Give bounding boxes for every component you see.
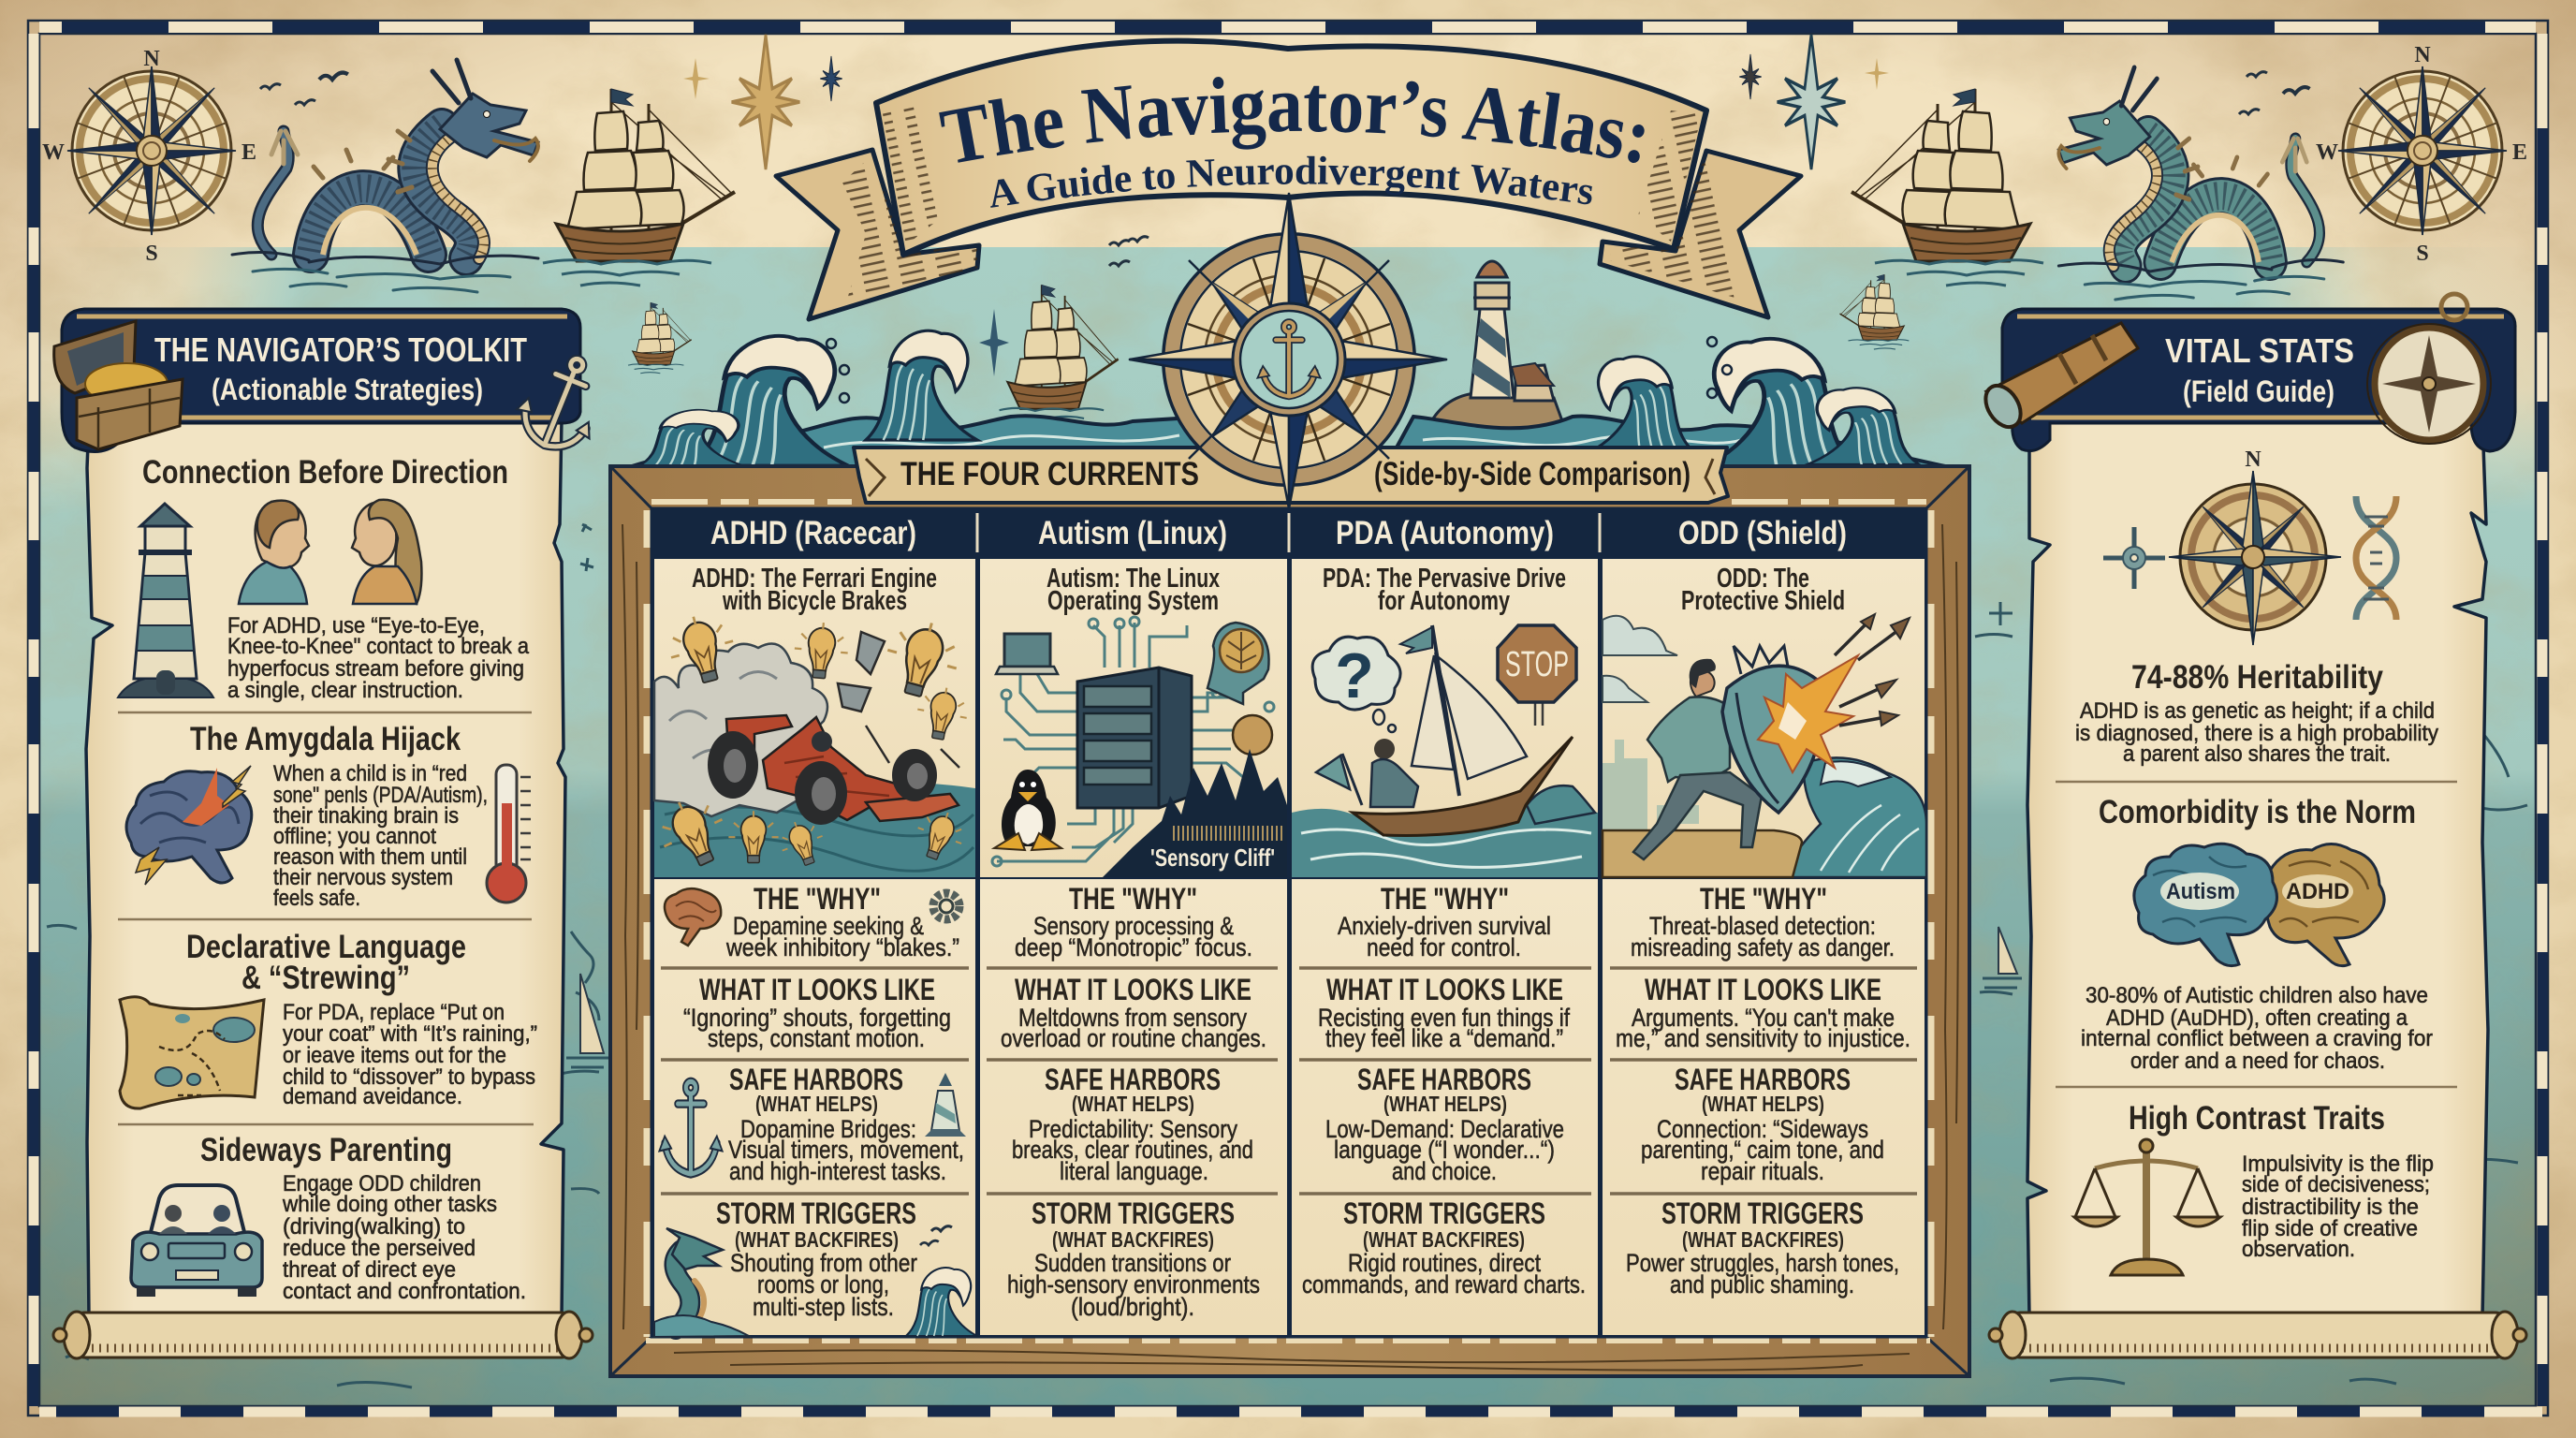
column ODD: (WHAT BACKFIRES) xyxy=(1682,1227,1844,1252)
column PDA: SAFE HARBORS xyxy=(1357,1063,1531,1096)
column ADHD: rooms or long, xyxy=(757,1270,889,1299)
panel: vital stats: 74-88% Heritability xyxy=(2131,659,2383,696)
comparison table xyxy=(650,508,1926,1337)
sailboat illustration: STOP xyxy=(1505,645,1569,684)
column ODD xyxy=(1603,515,1926,1299)
icon: dragon xyxy=(654,1228,749,1337)
column ODD: Power struggles, harsh tones, xyxy=(1626,1249,1899,1277)
icon: treasure map xyxy=(120,997,264,1108)
column PDA: (WHAT BACKFIRES) xyxy=(1363,1227,1525,1252)
compass rose top left: E xyxy=(242,140,256,165)
icon: lighthouse xyxy=(925,1073,966,1137)
sailboat illustration: ? xyxy=(1335,640,1374,712)
banner: VITAL STATS xyxy=(2165,331,2354,370)
heritability illustration: N xyxy=(2245,448,2261,472)
panel: navigator's toolkit: For PDA, replace “Put on xyxy=(283,1000,505,1025)
birds near compass xyxy=(1109,237,1149,266)
panel: vital stats: Comorbidity is the Norm xyxy=(2099,794,2416,830)
column ODD: repair rituals. xyxy=(1701,1157,1824,1185)
panel: vital stats: flip side of creative xyxy=(2242,1216,2418,1241)
small sailboat left margin xyxy=(566,974,608,1067)
column PDA: THE "WHY" xyxy=(1381,882,1509,916)
column PDA: need for control. xyxy=(1367,933,1521,961)
icon: overlapping brains: ADHD xyxy=(2286,879,2349,904)
panel: navigator's toolkit: Connection Before Direction xyxy=(142,454,508,491)
panel: navigator's toolkit: demand aveidance. xyxy=(283,1084,462,1109)
panel: navigator's toolkit: while doing other tasks xyxy=(282,1192,497,1217)
column ODD: and public shaming. xyxy=(1670,1270,1854,1299)
panel: navigator's toolkit: their nervous system xyxy=(273,865,453,890)
title text xyxy=(939,77,1645,208)
column PDA: and choice. xyxy=(1392,1157,1497,1185)
small boat left of compass xyxy=(628,302,692,374)
column Autism: Sensory processing & xyxy=(1033,912,1234,940)
icon: brain with lightning xyxy=(126,766,252,885)
central compass wheel xyxy=(1130,194,1446,508)
icon: spyglass xyxy=(1979,323,2138,433)
column ODD: THE "WHY" xyxy=(1700,882,1827,916)
icon: gear xyxy=(933,893,959,919)
column Autism: STORM TRIGGERS xyxy=(1032,1196,1235,1230)
ocean waves left xyxy=(632,330,1236,468)
panel: navigator's toolkit: your coat” with “It’s raining,” xyxy=(283,1021,537,1047)
column PDA: WHAT IT LOOKS LIKE xyxy=(1326,973,1563,1006)
icon: thermometer xyxy=(487,765,531,902)
column PDA: PDA (Autonomy) xyxy=(1336,515,1554,551)
compass rose top left: S xyxy=(145,242,158,266)
column PDA: language (“I wonder...“) xyxy=(1334,1136,1555,1164)
server and circuits illustration: 'Sensory Cliff' xyxy=(1150,844,1275,872)
compass rose top right: W xyxy=(2316,140,2338,165)
panel: navigator's toolkit: Knee-to-Knee" contact to break a xyxy=(227,634,529,659)
panel: navigator's toolkit: Declarative Language xyxy=(186,929,466,965)
dividers between rows xyxy=(661,968,1917,1194)
panel: navigator's toolkit: their tinaking brain is xyxy=(273,803,459,829)
banner xyxy=(2002,309,2515,451)
title text: A Guide to Neurodivergent Waters xyxy=(990,155,1592,208)
panel: navigator's toolkit: & “Strewing” xyxy=(242,960,410,996)
icon: birds xyxy=(920,1226,952,1245)
column ODD: Threat-blased detection: xyxy=(1649,912,1876,940)
column PDA: they feel like a “demand.” xyxy=(1325,1024,1563,1052)
shield warrior illustration xyxy=(1603,614,1926,877)
column ODD: WHAT IT LOOKS LIKE xyxy=(1645,973,1881,1006)
panel: navigator's toolkit xyxy=(53,309,615,1358)
column PDA: (WHAT HELPS) xyxy=(1383,1092,1507,1116)
column ADHD: (WHAT HELPS) xyxy=(755,1092,878,1116)
column ODD: misreading safety as danger. xyxy=(1631,933,1895,961)
panel: vital stats: observation. xyxy=(2242,1237,2355,1262)
wooden frame xyxy=(610,466,1969,1376)
column ODD: parenting,“ caim tone, and xyxy=(1641,1136,1884,1164)
birds left xyxy=(260,73,348,105)
column ADHD: THE "WHY" xyxy=(754,882,881,916)
small sailboat right margin xyxy=(1983,927,2022,988)
panel: navigator's toolkit: threat of direct eye xyxy=(283,1257,456,1283)
compass rose top right: E xyxy=(2512,140,2527,165)
column Autism: breaks, clear routines, and xyxy=(1012,1136,1253,1164)
column PDA: Low-Demand: Declarative xyxy=(1325,1115,1564,1143)
column Autism: (WHAT HELPS) xyxy=(1072,1092,1194,1116)
small boat right of compass xyxy=(1840,274,1909,349)
panel: vital stats: internal conflict between a craving for xyxy=(2081,1026,2433,1051)
navy star near ship xyxy=(979,309,1009,376)
column Autism: Autism (Linux) xyxy=(1038,515,1227,551)
column ADHD: WHAT IT LOOKS LIKE xyxy=(699,973,935,1006)
compass rose top right xyxy=(2316,43,2527,266)
icon: lighthouse xyxy=(118,504,213,697)
four currents signboard xyxy=(854,448,1728,503)
panel: navigator's toolkit: The Amygdala Hijack xyxy=(190,721,461,757)
column ODD: Protective Shield xyxy=(1681,586,1845,616)
column PDA: Anxiely-driven survival xyxy=(1338,912,1551,940)
panel: vital stats: Impulsivity is the flip xyxy=(2242,1152,2434,1177)
column Autism: SAFE HARBORS xyxy=(1045,1063,1221,1096)
panel: navigator's toolkit: For ADHD, use “Eye-to-Eye, xyxy=(227,613,485,638)
stars left xyxy=(683,35,842,169)
compass rose top right: N xyxy=(2414,43,2431,67)
panel: navigator's toolkit: feels safe. xyxy=(273,886,360,911)
panel: navigator's toolkit: Sideways Parenting xyxy=(200,1132,452,1168)
icon: balance scale xyxy=(2074,1139,2220,1275)
gallery ship centre xyxy=(1000,285,1119,427)
column ADHD xyxy=(650,515,977,1337)
birds right xyxy=(2239,72,2310,114)
column Autism: overload or routine changes. xyxy=(1001,1024,1266,1052)
column ODD: ODD: The xyxy=(1717,564,1809,594)
icon: anchor xyxy=(508,345,615,460)
column ODD: SAFE HARBORS xyxy=(1675,1063,1851,1096)
panel: navigator's toolkit: contact and confrontation. xyxy=(283,1279,526,1304)
racecar illustration xyxy=(650,609,975,877)
bottom scroll roll xyxy=(53,1312,593,1358)
ocean waves right xyxy=(1385,337,1945,468)
panel: vital stats: order and a need for chaos. xyxy=(2130,1049,2385,1074)
column PDA xyxy=(1292,515,1598,1299)
heritability illustration xyxy=(2103,448,2396,645)
column Autism: deep “Monotropic” focus. xyxy=(1015,933,1252,961)
column ADHD: ADHD (Racecar) xyxy=(710,515,916,551)
four currents signboard: THE FOUR CURRENTS xyxy=(900,456,1199,492)
panel: vital stats: is diagnosed, there is a high probability xyxy=(2075,721,2439,746)
sea serpent left xyxy=(232,60,538,292)
column PDA: for Autonomy xyxy=(1378,586,1510,616)
compass rose top left: N xyxy=(143,47,160,71)
title text: The Navigator’s Atlas: xyxy=(939,77,1645,163)
column ADHD: SAFE HARBORS xyxy=(729,1063,903,1096)
panel: navigator's toolkit: reduce the perseived xyxy=(283,1236,476,1261)
banner: THE NAVIGATOR’S TOOLKIT xyxy=(154,330,527,369)
panel: vital stats: 30-80% of Autistic children also have xyxy=(2086,983,2428,1008)
column PDA: Recisting even fun things if xyxy=(1318,1004,1570,1032)
panel: navigator's toolkit: reason with them until xyxy=(273,844,467,870)
column ADHD: Dopamine Bridges: xyxy=(740,1115,916,1143)
server and circuits illustration xyxy=(992,617,1287,877)
panel: vital stats: High Contrast Traits xyxy=(2129,1100,2385,1137)
column PDA: PDA: The Pervasive Drive xyxy=(1323,564,1566,594)
panel: vital stats: ADHD (AuDHD), often creating a xyxy=(2106,1005,2408,1031)
column ADHD: (WHAT BACKFIRES) xyxy=(735,1227,899,1252)
icon: overlapping brains: Autism xyxy=(2166,879,2235,904)
ribbon main band xyxy=(876,41,1706,255)
column Autism: Predictability: Sensory xyxy=(1029,1115,1237,1143)
panel: vital stats: ADHD is as genetic as height; if a child xyxy=(2080,698,2435,724)
column ODD: Connection: “Sideways xyxy=(1657,1115,1868,1143)
column Autism: (WHAT BACKFIRES) xyxy=(1052,1227,1214,1252)
sailboat illustration xyxy=(1292,625,1598,877)
column Autism: (loud/bright). xyxy=(1071,1293,1194,1321)
ribbon left tail xyxy=(776,150,979,319)
banner: (Field Guide) xyxy=(2183,374,2334,408)
bottom scroll roll xyxy=(1989,1312,2526,1358)
panel: navigator's toolkit: a single, clear instruction. xyxy=(227,678,463,703)
compass rose top left: W xyxy=(42,140,65,165)
column ODD: ODD (Shield) xyxy=(1678,515,1847,551)
column PDA: STORM TRIGGERS xyxy=(1343,1196,1545,1230)
column ODD: Arguments. “You can't make xyxy=(1632,1004,1895,1032)
column ODD: me,” and sensitivity to injustice. xyxy=(1616,1024,1910,1052)
icon: brain xyxy=(665,888,721,946)
column Autism xyxy=(992,515,1287,1321)
column ADHD: steps, constant motion. xyxy=(708,1024,925,1052)
column ODD: (WHAT HELPS) xyxy=(1702,1092,1824,1116)
column ADHD: with Bicycle Brakes xyxy=(722,586,907,616)
panel: navigator's toolkit: or ieave items out for the xyxy=(283,1043,506,1068)
column ODD: STORM TRIGGERS xyxy=(1661,1196,1864,1230)
column Autism: high-sensory environments xyxy=(1007,1270,1260,1299)
panel: vital stats: side of decisiveness; xyxy=(2242,1172,2430,1197)
compass rose top right: S xyxy=(2416,242,2429,266)
column Autism: literal language. xyxy=(1060,1157,1208,1185)
column PDA: Rigid routines, direct xyxy=(1348,1249,1541,1277)
icon: overlapping brains xyxy=(2134,844,2384,966)
icon: child facing parent xyxy=(239,500,421,604)
stars right xyxy=(1739,35,1889,169)
column ADHD: “Ignoring” shouts, forgetting xyxy=(683,1004,951,1032)
panel: vital stats: distractibility is the xyxy=(2242,1195,2419,1220)
sea serpent right xyxy=(2058,67,2343,300)
parchment sheet xyxy=(86,419,565,1317)
four currents signboard: (Side-by-Side Comparison) xyxy=(1374,456,1690,492)
column ADHD: Depamine seeking & xyxy=(733,912,924,940)
title ribbon xyxy=(773,37,1803,322)
panel: navigator's toolkit: (driving(walking) to xyxy=(283,1214,465,1240)
icon: anchor xyxy=(659,1081,723,1174)
column Autism: Sudden transitions or xyxy=(1034,1249,1231,1277)
panel: navigator's toolkit: offline; you cannot xyxy=(273,824,436,849)
column Autism: Operating System xyxy=(1047,586,1219,616)
banner xyxy=(62,309,580,451)
banner: (Actionable Strategies) xyxy=(212,373,483,406)
icon: treasure chest xyxy=(54,321,183,449)
column ADHD: multi-step lists. xyxy=(753,1293,894,1321)
panel: navigator's toolkit: child to “dissover” to bypass xyxy=(283,1064,535,1090)
column ADHD: Shouting from other xyxy=(730,1249,917,1277)
tall ship right xyxy=(1852,89,2043,286)
column Autism: THE "WHY" xyxy=(1069,882,1197,916)
decorative sea sketches xyxy=(47,524,2527,1387)
column ADHD: ADHD: The Ferrari Engine xyxy=(692,564,937,594)
parchment sheet xyxy=(2027,419,2488,1317)
column Autism: Meltdowns from sensory xyxy=(1018,1004,1247,1032)
column PDA: commands, and reward charts. xyxy=(1302,1270,1586,1299)
panel: vital stats: a parent also shares the trait. xyxy=(2123,741,2391,767)
column Autism: Autism: The Linux xyxy=(1046,564,1220,594)
icon: pocket compass xyxy=(2367,294,2491,444)
ribbon right tail xyxy=(1600,151,1801,317)
column ADHD: and high-interest tasks. xyxy=(729,1157,946,1185)
tall ship left xyxy=(543,89,735,286)
column ADHD: Visual timers, movement, xyxy=(728,1136,964,1164)
compass rose top left xyxy=(42,47,256,266)
column ADHD: STORM TRIGGERS xyxy=(716,1196,916,1230)
column ADHD: week inhibitory “blakes.” xyxy=(725,933,959,961)
column Autism: WHAT IT LOOKS LIKE xyxy=(1015,973,1251,1006)
icon: car with two people xyxy=(131,1185,262,1297)
lighthouse on rock xyxy=(1427,261,1565,429)
panel: navigator's toolkit: hyperfocus stream before giving xyxy=(227,656,524,682)
icon: wave xyxy=(906,1268,977,1336)
panel: navigator's toolkit: sone" penls (PDA/Autism), xyxy=(273,783,488,808)
panel: navigator's toolkit: Engage ODD children xyxy=(283,1171,481,1196)
panel: vital stats xyxy=(1979,294,2526,1358)
panel: navigator's toolkit: When a child is in “red xyxy=(273,761,467,786)
